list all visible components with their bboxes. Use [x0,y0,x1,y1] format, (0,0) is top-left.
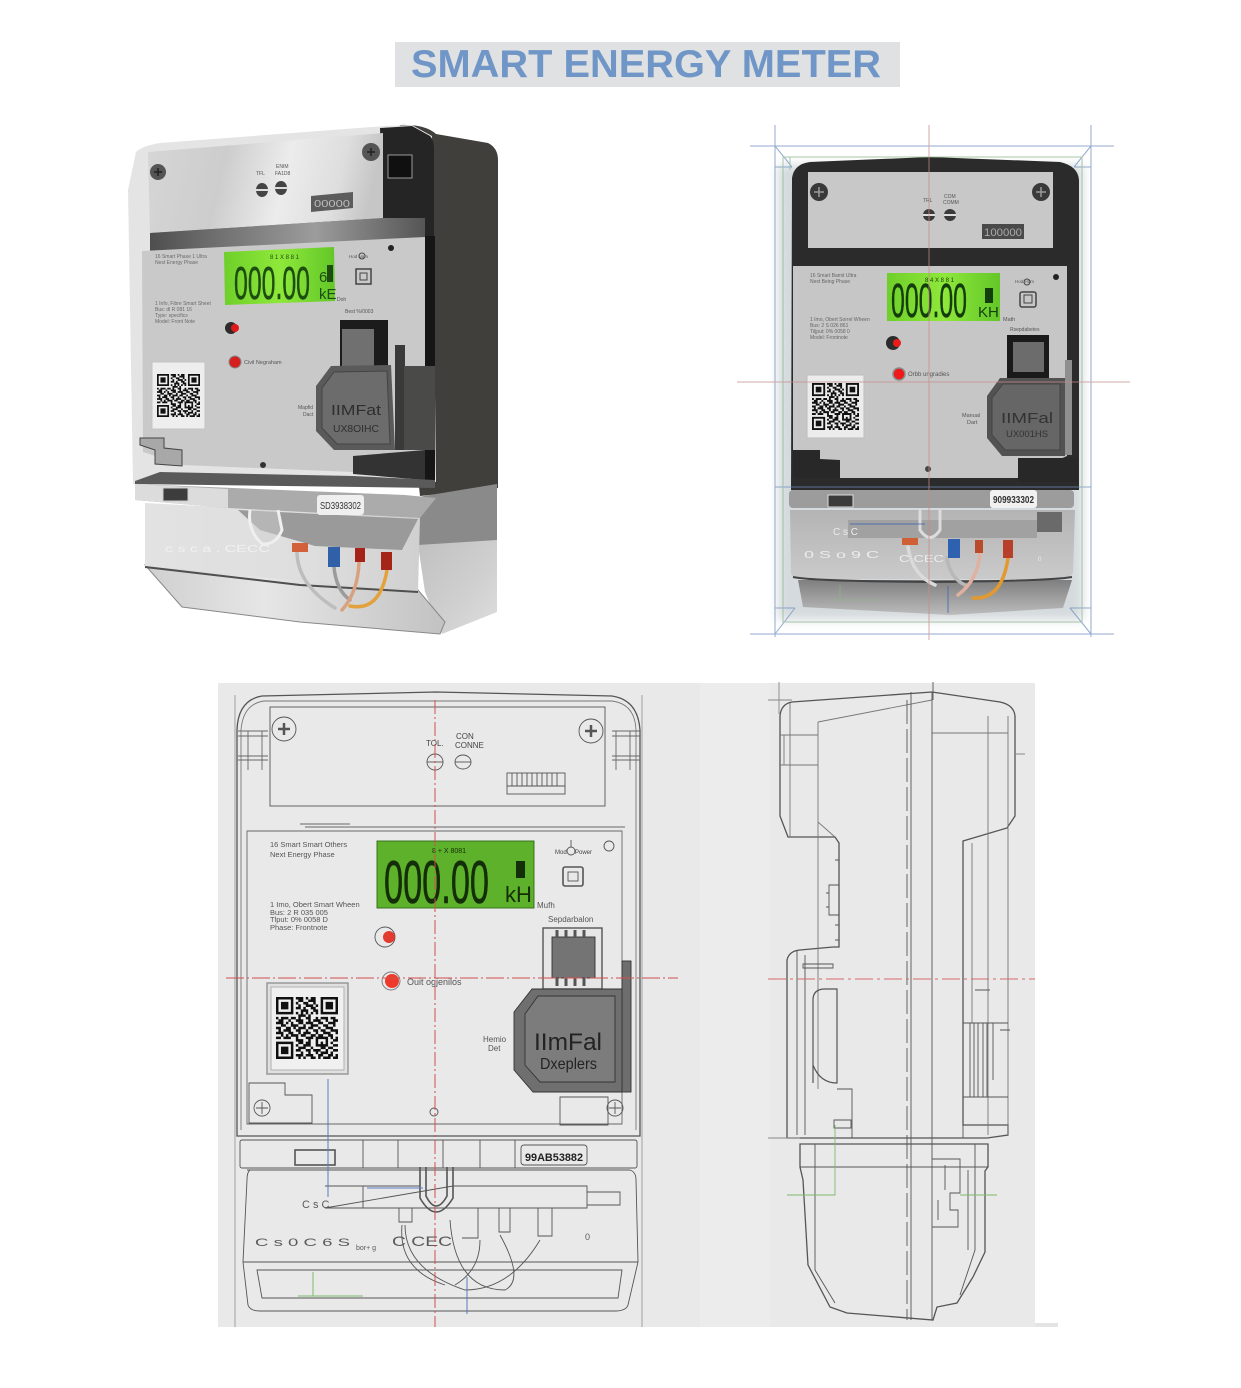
status LED [229,356,282,368]
counter [982,224,1024,239]
screw left [150,164,166,180]
antenna [622,961,631,1092]
communication module cover: UX001HS [1006,429,1048,439]
faceplate text: Bus: 2 S 026 861 [810,323,849,329]
embossed cover text: C s C [302,1199,330,1211]
faceplate text: Tlput: 0% 0058 D [270,915,329,924]
dark meter shell [791,157,1079,490]
display edge details [826,860,839,940]
lower cover inner lines [800,1144,988,1303]
communication module cover: IIMFal [1001,410,1053,427]
lcd screen: 6 [319,269,327,286]
plate labels: COM [944,194,956,200]
dark meter housing [400,125,498,496]
right terminal hatch [963,990,1010,1138]
lcd screen: 000.00 [234,257,310,309]
side labels: Det [488,1044,501,1053]
lower latches [249,1083,623,1125]
lower right pale reflection [418,540,497,634]
red center line [768,978,1035,980]
transparent cover outline [128,125,436,484]
seal loop [420,1167,453,1212]
embossed cover text: bor+ g [356,1245,376,1252]
top plate [270,707,605,806]
top silver plate [148,133,383,233]
seal loop [250,510,282,544]
clear band [135,484,436,518]
antenna [1065,360,1072,455]
side labels: Hemio [483,1035,507,1044]
main faceplate [142,237,425,472]
drawing: side elevation [768,682,1035,1320]
small faceplate labels [298,297,374,418]
faceplate text: Model: Frontnote [810,335,848,341]
clear band [240,1140,637,1168]
connector port [543,928,602,989]
faceplate text: 1 Imo, Obert Sorrel Wheen [810,317,870,323]
faceplate text: Phase: Frontnote [270,923,328,932]
hinge hatches [238,731,640,770]
qr code [152,362,205,429]
drawing: front elevation [226,692,678,1327]
faceplate text: Bus: 2 R 035 005 [270,908,328,917]
lower cover outline [800,1144,988,1320]
terminal block end [1037,512,1062,532]
faceplate text: 16 Smart Phase 1 Ultra [155,254,207,260]
communication module cover: IIMFat [331,402,382,419]
title: SMART ENERGY METER [411,43,881,86]
communication module cover [316,365,395,450]
lcd screen [224,247,337,309]
lcd screen: 8 4 X 8 8 1 [925,278,955,284]
wires [908,547,1008,598]
status LED [382,972,462,990]
side labels: Mufh [537,901,555,910]
embossed cover text: 0 [1038,557,1042,563]
terminal detail [932,1159,960,1227]
icon, dots and labels [925,274,1059,472]
faceplate text: Type: specifics [155,313,188,319]
icon, dots and labels: Rsepdabetes [1010,327,1040,333]
status LED [893,368,949,380]
faceplate text: 1 Info, Fibre Smart Sheet [155,301,211,307]
plate labels: TOL. [426,739,444,748]
plate labels: CON [456,732,474,741]
serial label: 909933302 [993,495,1034,506]
icon and hole marks: Power [575,850,592,856]
side labels [483,901,593,1053]
reference lines [768,682,1025,1138]
communication module cover [514,989,622,1092]
cover lip line [145,567,418,592]
serial label [317,495,364,515]
clear band [789,490,1074,508]
dark seam below faceplate [135,472,435,488]
mechanical counter: 00000 [314,199,351,210]
lcd screen: kH [505,882,532,907]
screws [272,717,603,743]
faceplate text: 16 Smart Smart Others [270,840,347,849]
small top labels: FA1D8 [275,171,291,177]
faceplate outline [247,824,625,1124]
communication module cover [987,378,1065,456]
top plate indicators [255,181,288,197]
wire terminals [399,1208,552,1238]
terminal block [848,520,1037,538]
serial label: 99AB53882 [525,1152,583,1164]
upper right latch [388,155,412,178]
pulse LED [375,927,395,947]
lower right glass reflection [418,484,497,550]
photo: front view with construction lines [737,125,1130,640]
plate labels [923,194,959,206]
faceplate text: Next Being Phase [810,279,850,285]
faceplate text: Bus: dl R 081 16 [155,307,192,313]
embossed cover text: 0 [585,1232,590,1242]
cover lip line [793,577,1072,582]
icon and hole marks [430,840,614,1116]
icon, dots and labels: Hod Ham [1015,279,1034,284]
wires [402,1220,540,1290]
small top labels: ENIM [276,164,288,170]
plate labels [426,732,484,750]
small faceplate labels: Doh [337,297,346,303]
communication module cover: UX8OIHC [333,424,379,435]
lcd screen: kE [319,286,337,303]
technical drawing sheet [218,683,1058,1327]
dark corner behind plate [150,126,434,252]
faceplate text: 16 Smart Bamit Ultra [810,273,857,279]
embossed cover text: C CEC [899,554,944,565]
small faceplate labels: Mapfid [298,405,313,411]
upper housing outline [780,692,1015,1138]
icon, dots and labels: Manual [962,413,980,419]
small top labels: TFL [256,171,265,177]
photo: 3D perspective view of meter [128,125,498,634]
faceplate text: Next Energy Phase [270,850,335,859]
lcd screen: 8 1 X 8 8 1 [270,255,300,261]
communication module cover: IImFal [534,1029,602,1056]
embossed cover text [804,527,1042,565]
dashed center axis [906,700,908,1320]
wires [297,553,387,610]
serial label [521,1145,587,1165]
upper cover [790,510,1075,579]
small faceplate labels: Best %/0003 [345,309,374,315]
serial label: SD3938302 [320,501,361,512]
qr code [807,375,864,438]
module cover side [797,951,837,1135]
embossed cover text: C s 0 C 6 S [255,1237,350,1249]
serial label [990,490,1037,508]
lower cover front, lower section [145,565,445,634]
top plate [808,172,1053,248]
seal loop [920,510,940,538]
connector port [1007,335,1049,378]
antenna housing [395,345,435,450]
colored construction lines [226,700,678,1327]
counter: 100000 [984,227,1022,239]
embossed cover text [255,1199,590,1252]
center lines [911,682,933,1320]
connector port [340,320,388,372]
communication module cover: Dxeplers [540,1056,597,1073]
small faceplate labels: Dact [303,412,314,418]
faceplate text [155,254,211,325]
terminal block [325,1186,620,1208]
mechanical counter [311,192,353,212]
faceplate text: Nest Energy Phase [155,260,198,266]
left latch [140,438,182,466]
status LED: Civil Negraham [244,360,282,366]
inner housing lines [780,700,1008,1135]
small top labels [256,164,291,177]
screws [810,183,1050,201]
pulse LED [225,322,239,334]
counter [507,773,565,794]
lower cover tray [798,580,1072,615]
pulse LED [886,336,901,350]
faceplate text: Tiljput: 0% 0058 0 [810,329,850,335]
faceplate [793,266,1067,478]
glass band under plate [150,218,425,252]
plate labels: CONNE [455,741,484,750]
embossed cover text: C s C [833,527,858,538]
wire terminals [292,543,392,570]
screw right [362,143,380,161]
construction lines [737,125,1130,640]
embossed cover text: 0 S o 9 C [804,550,879,561]
faceplate text [810,273,870,341]
status LED: Ouit ogjenilos [407,977,462,987]
lower cover outline [243,1170,638,1311]
lower cover front, upper section [145,503,420,592]
latch slot [828,495,853,507]
plate labels: TRL [923,198,933,204]
faceplate text [270,840,360,932]
wire terminals [902,538,1013,558]
plate indicators [427,754,471,770]
plate indicators [923,209,956,221]
lcd screen: 000.00 [384,849,489,916]
icon and hole marks: Mod [555,850,567,856]
right icon and dot: Hod Nam [349,254,368,259]
backdrop haze [778,165,1083,620]
right latch [353,450,425,480]
right icon and dot [260,245,394,468]
side labels: Sepdarbalon [548,915,593,924]
clear band highlight [135,484,228,508]
inner housing outline [241,701,636,1130]
lower latches [793,450,1078,482]
lcd screen: 8 + X 8081 [432,848,466,855]
icon, dots and labels: Math [1003,317,1015,323]
embossed cover text: C CEC [392,1233,452,1249]
status LED: Orbb ungradies [908,372,949,378]
terminal block [238,510,418,550]
outer housing outline [237,692,640,1136]
faceplate text: Model: Front Note [155,319,195,325]
lcd screen: 000.00 [891,275,967,328]
plate labels: COMM [943,200,959,206]
latch slot [163,488,188,501]
lower latch [834,1089,852,1138]
green construction line [787,1125,997,1195]
faceplate text: 1 Imo, Obert Smart Wheen [270,900,360,909]
inner dark strip [425,236,435,484]
icon, dots and labels: Dart [967,420,978,426]
sheet border lines [235,695,642,1327]
embossed cover marks: c s c a . CECC [165,544,270,555]
lcd screen: KH [978,304,999,321]
qr code [267,983,348,1074]
